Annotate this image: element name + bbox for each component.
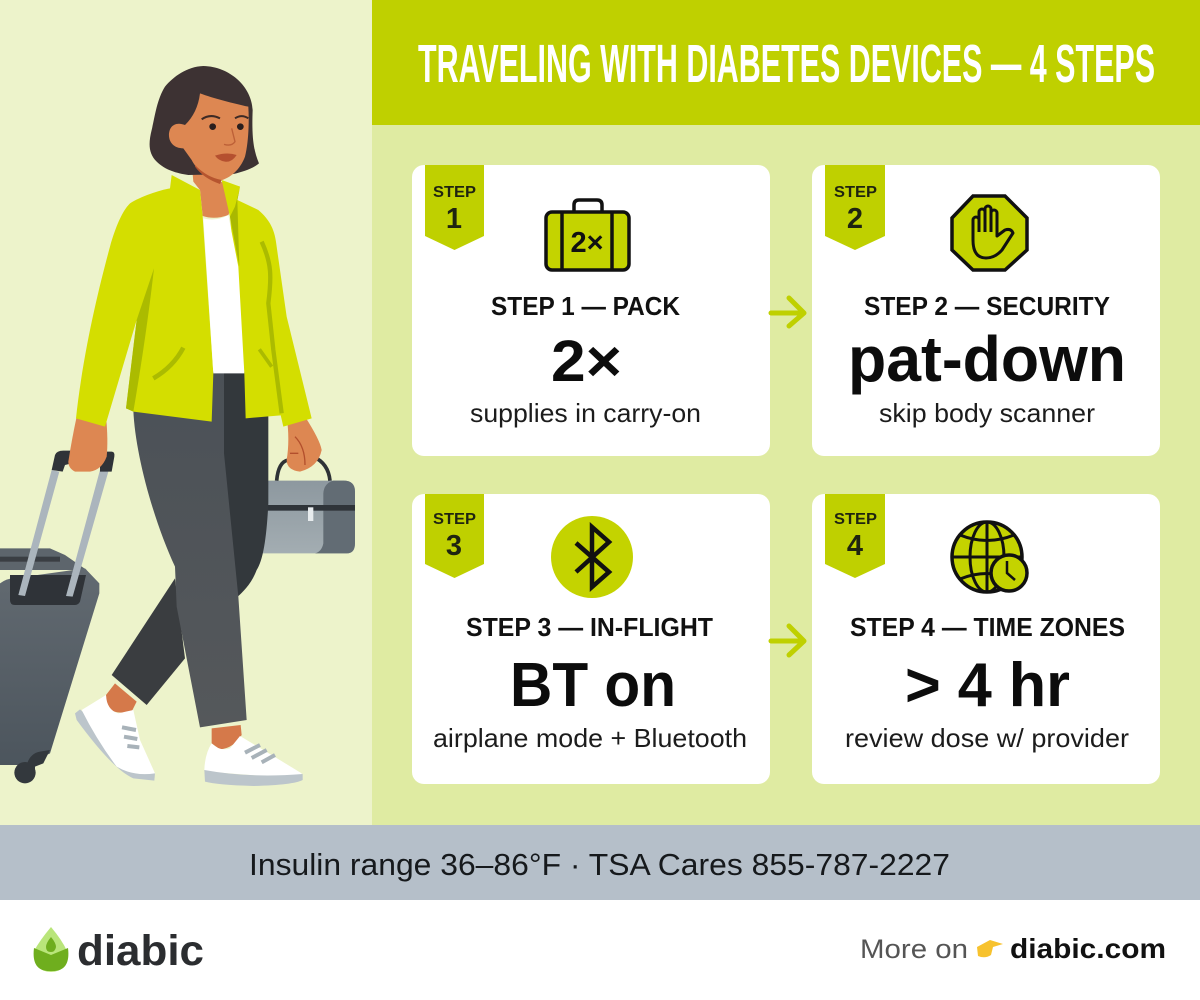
arrow: step 1 to step 2 bbox=[771, 298, 804, 326]
footer bbox=[0, 900, 1200, 1000]
link text: more on: More on bbox=[860, 934, 968, 964]
figure: upper body bbox=[76, 66, 312, 427]
heading: step 4: STEP 4 — TIME ZONES bbox=[850, 612, 1125, 642]
panel: step 1 card bbox=[412, 165, 770, 456]
badge: step 4: STEP bbox=[834, 511, 877, 528]
figure: head and hair bbox=[150, 66, 259, 184]
icon: globe with clock bbox=[952, 522, 1027, 592]
caption: skip body scanner: skip body scanner bbox=[879, 398, 1095, 428]
badge: step 2: STEP bbox=[834, 184, 877, 201]
panel: step 2 card bbox=[812, 165, 1160, 456]
badge: step 3: 3 bbox=[446, 530, 462, 562]
arrow: step 3 to step 4 bbox=[771, 626, 804, 655]
figure: jacket and shirt bbox=[76, 175, 312, 427]
icon: carry-on bag bbox=[262, 457, 355, 553]
badge: step 4: 4 bbox=[847, 530, 863, 562]
figure: left hand bbox=[68, 417, 107, 472]
panel: right steps background bbox=[372, 125, 1200, 825]
panel: step 3 card bbox=[412, 494, 770, 784]
figure: neck bbox=[192, 163, 240, 218]
caption: airplane mode: airplane mode + Bluetooth bbox=[433, 723, 747, 753]
badge: step 4 bbox=[825, 494, 885, 578]
badge: step 3 bbox=[425, 494, 484, 578]
figure: right hand bbox=[287, 417, 322, 472]
panel: step 4 card bbox=[812, 494, 1160, 784]
title banner bbox=[372, 0, 1200, 125]
panel: left illustration background bbox=[0, 0, 372, 825]
caption: review dose: review dose w/ provider bbox=[845, 723, 1129, 753]
badge: step 2: 2 bbox=[847, 203, 863, 235]
value: over 4 hr: > 4 hr bbox=[905, 651, 1070, 720]
badge: step 1 bbox=[425, 165, 484, 250]
logo: diabic drop bbox=[34, 927, 68, 972]
icon: rolling suitcase bbox=[0, 451, 114, 783]
badge: step 1: STEP bbox=[433, 184, 476, 201]
caption: supplies: supplies in carry-on bbox=[470, 398, 701, 428]
heading: step 2: STEP 2 — SECURITY bbox=[864, 291, 1110, 321]
icon: suitcase 2x: 2× bbox=[570, 227, 604, 259]
figure: pants bbox=[112, 372, 268, 727]
link text: diabic.com: diabic.com bbox=[1010, 933, 1166, 964]
icon: hand stop octagon bbox=[952, 196, 1027, 270]
logo: wordmark: diabic bbox=[77, 927, 204, 975]
info band: insulin range and TSA Cares bbox=[0, 825, 1200, 900]
heading: step 1: STEP 1 — PACK bbox=[491, 291, 680, 321]
value: pat-down: pat-down bbox=[848, 323, 1126, 395]
icon: suitcase 2x bbox=[546, 200, 629, 270]
value: BT on: BT on bbox=[510, 651, 676, 720]
badge: step 2 bbox=[825, 165, 885, 250]
heading: step 3: STEP 3 — IN-FLIGHT bbox=[466, 612, 713, 642]
info band: insulin range and TSA Cares: Insulin range 36–86°F · TSA Cares 855-787-2227 bbox=[249, 847, 950, 882]
illustration: traveler with luggage bbox=[0, 66, 355, 786]
figure: lower body and luggage bbox=[0, 372, 355, 786]
icon: bluetooth bbox=[551, 516, 633, 598]
badge: step 3: STEP bbox=[433, 511, 476, 528]
icon: pointing hand bbox=[977, 940, 1003, 957]
figure: shoes bbox=[75, 683, 303, 786]
badge: step 1: 1 bbox=[446, 203, 462, 235]
value: 2x: 2× bbox=[551, 329, 622, 394]
